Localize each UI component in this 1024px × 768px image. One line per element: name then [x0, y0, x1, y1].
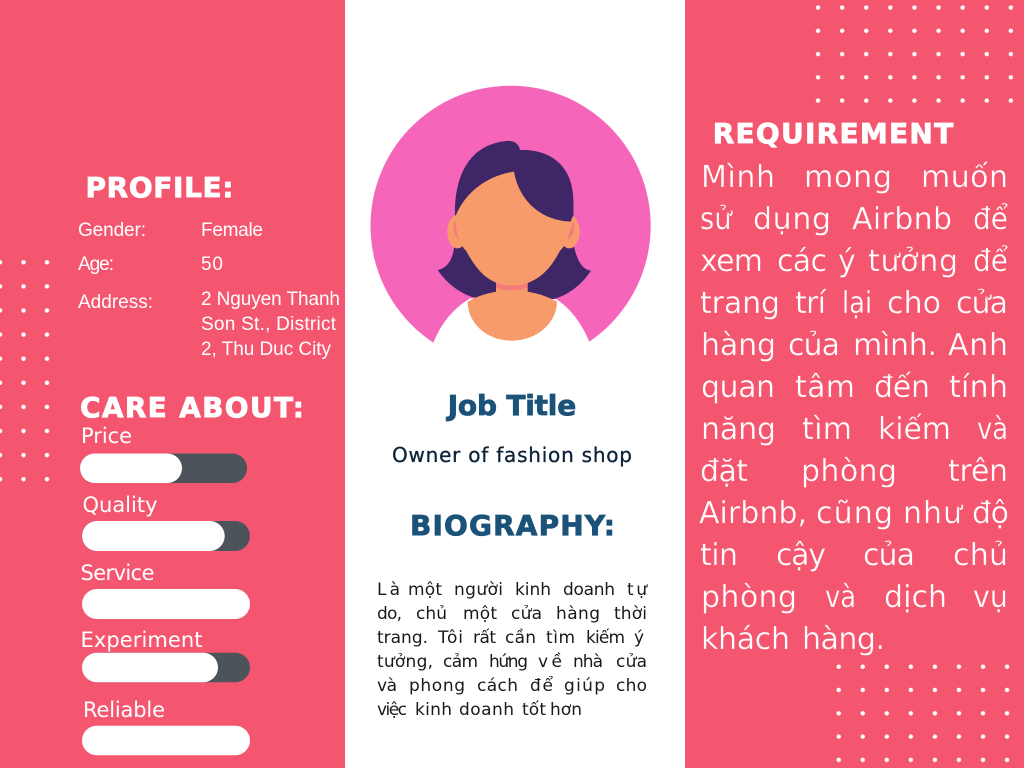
text: biography: kinh: [415, 700, 452, 720]
text: biography: phong: [409, 676, 465, 696]
text: biography: rất: [473, 627, 496, 648]
text: biography: người: [454, 580, 503, 600]
text: requirement body: ý: [838, 244, 856, 279]
text: requirement body: tưởng: [868, 244, 958, 279]
text: biography: về: [538, 651, 562, 672]
text: biography: việc: [377, 700, 407, 720]
text: requirement body: độ: [972, 496, 1009, 531]
panel: left profile: [0, 0, 345, 768]
text: requirement body: mong: [804, 160, 892, 195]
text: biography: ý: [634, 628, 644, 648]
text: biography: hàng: [556, 604, 600, 624]
text: biography: trang.: [377, 628, 428, 648]
text: biography: cửa: [511, 604, 542, 624]
rating: service: [80, 561, 250, 619]
text: requirement body: tin: [700, 538, 738, 573]
text: biography: cách: [477, 676, 518, 696]
rating: quality: Quality: [82, 493, 158, 517]
text: requirement body: khách: [701, 622, 790, 657]
text: requirement body: cậy: [776, 538, 826, 573]
dot pattern: top right: [806, 0, 1024, 112]
text: requirement body: tìm: [802, 412, 852, 447]
profile details: Address:: [78, 292, 153, 313]
profile details: 2 Nguyen Thanh: [201, 289, 340, 310]
profile details: 50: [201, 254, 223, 275]
text: requirement body: đặt: [700, 454, 748, 489]
rating: experiment: [80, 628, 250, 682]
text: biography: để: [530, 675, 554, 696]
text: biography: cảm: [443, 652, 478, 672]
text: requirement body: phòng: [801, 454, 897, 489]
text: requirement body: kiếm: [878, 412, 951, 447]
text: job description: Owner of fashion shop: [392, 443, 632, 467]
profile details: 2, Thu Duc City: [201, 339, 332, 360]
rating: service: Service: [80, 561, 154, 585]
text: requirement body: để: [973, 243, 1008, 278]
text: requirement body: xem: [700, 244, 763, 279]
text: requirement body: Airbnb: [852, 202, 952, 237]
text: requirement body: dụng: [753, 202, 831, 237]
text: requirement body: chủ: [953, 538, 1008, 573]
text: requirement body: vụ: [973, 579, 1008, 614]
rating: price: Price: [81, 424, 132, 448]
text: biography: cho: [616, 676, 647, 696]
text: requirement body: Anh: [948, 328, 1008, 363]
text: biography: một: [408, 580, 442, 600]
text: requirement body: các: [777, 244, 827, 279]
text: requirement body: tâm: [795, 370, 855, 405]
text: requirement body: hàng: [701, 328, 776, 363]
text: requirement body: năng: [701, 412, 776, 447]
text: requirement body: như: [903, 496, 964, 531]
text: requirement body: Mình: [701, 160, 775, 195]
text: biography: do,: [377, 604, 402, 624]
heading: care about: CARE ABOUT:: [80, 391, 304, 424]
text: biography: chủ: [416, 604, 447, 624]
heading: biography: BIOGRAPHY:: [410, 509, 615, 542]
text: requirement body: muốn: [921, 160, 1008, 195]
text: requirement body: sử: [700, 201, 733, 236]
rating: reliable: [82, 698, 250, 755]
text: requirement body: trang: [700, 286, 780, 321]
text: biography: hơn: [550, 700, 582, 720]
text: biography: [377, 580, 648, 720]
text: biography: tự: [627, 580, 648, 600]
text: requirement body: trí: [795, 286, 828, 321]
text: requirement body: và: [825, 579, 856, 615]
text: requirement body: tính: [949, 370, 1008, 405]
profile details: Gender:: [78, 220, 146, 241]
text: requirement body: [699, 160, 1009, 657]
text: biography: giúp: [564, 676, 605, 696]
heading: job title: Job Title: [446, 389, 576, 422]
text: biography: thời: [614, 604, 647, 624]
text: requirement body: cửa: [956, 286, 1008, 321]
text: biography: một: [463, 604, 497, 624]
text: biography: doanh: [459, 700, 514, 720]
text: requirement body: cho: [887, 286, 941, 321]
text: biography: Là: [377, 580, 400, 600]
text: biography: tốt: [522, 699, 546, 720]
text: biography: kinh: [515, 580, 551, 600]
text: biography: nhà: [573, 652, 603, 672]
rating: price: [80, 424, 247, 483]
text: biography: tìm: [546, 628, 575, 648]
text: biography: Tôi: [437, 628, 463, 648]
heading: requirement: REQUIREMENT: [713, 117, 953, 150]
text: requirement body: hàng.: [802, 622, 885, 657]
text: requirement body: phòng: [701, 580, 797, 615]
text: requirement body: để: [973, 201, 1008, 236]
heading: profile: PROFILE:: [86, 171, 234, 204]
dot pattern: bottom right: [827, 655, 1024, 768]
text: requirement body: lại: [842, 285, 872, 321]
text: requirement body: của: [863, 538, 915, 573]
profile details: [78, 220, 340, 360]
text: biography: kiếm: [586, 627, 625, 648]
text: requirement body: dịch: [884, 580, 947, 615]
text: requirement body: của: [788, 328, 840, 363]
profile details: Female: [201, 220, 263, 241]
text: biography: và: [377, 676, 397, 696]
text: requirement body: trên: [948, 454, 1008, 489]
text: requirement body: Airbnb,: [699, 496, 807, 531]
text: biography: hứng: [489, 652, 528, 672]
text: requirement body: cũng: [816, 496, 893, 531]
profile details: Age:: [78, 254, 114, 275]
text: biography: cửa: [616, 652, 647, 672]
rating: quality: [82, 493, 250, 551]
icon: avatar portrait: [370, 86, 651, 343]
text: biography: doanh: [563, 580, 615, 600]
panel: center biography: [345, 0, 685, 768]
dot pattern: left: [0, 250, 60, 491]
text: requirement body: đến: [874, 370, 930, 405]
rating: reliable: Reliable: [83, 698, 165, 722]
profile details: Son St., District: [201, 314, 337, 335]
text: requirement body: mình.: [853, 328, 937, 363]
text: biography: cần: [505, 627, 536, 648]
rating: experiment: Experiment: [80, 628, 202, 652]
text: requirement body: và: [977, 411, 1008, 447]
text: requirement body: quan: [701, 370, 775, 405]
panel: right requirement: [685, 0, 1024, 768]
text: biography: tưởng,: [377, 652, 433, 672]
